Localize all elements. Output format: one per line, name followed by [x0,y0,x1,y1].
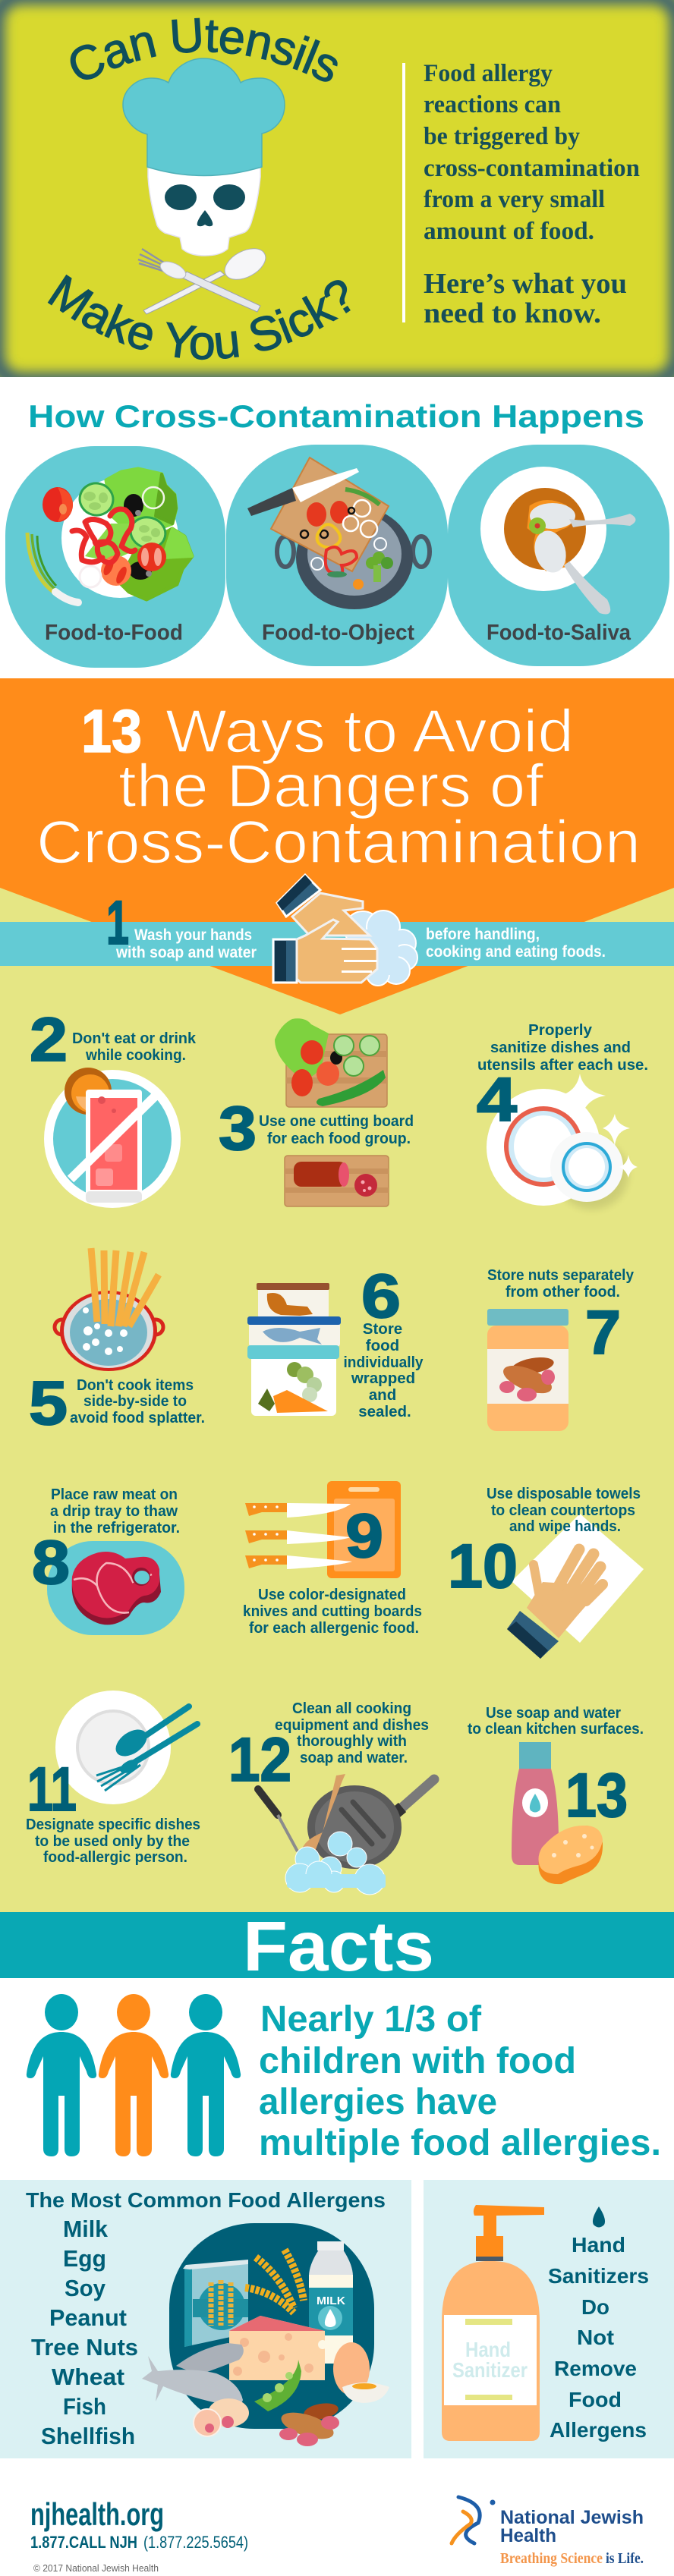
text: Place raw meat on [51,1486,178,1503]
text: and [369,1386,396,1404]
text: Use one cutting board [259,1112,414,1130]
text: soap and water. [300,1749,408,1766]
number: 3 [219,1094,257,1163]
fact text: allergies have [259,2082,497,2122]
icon: three people [27,1994,241,2156]
text [50,1486,180,1536]
number: 4 [477,1065,517,1134]
step 13: soap and water [468,1704,644,1884]
card: food-to-object [226,445,448,666]
icon: drop [593,2206,605,2228]
step 4: sanitize dishes [477,1021,648,1209]
text: for each food group. [267,1130,411,1147]
text: Store nuts separately [487,1266,635,1284]
step 1: wash hands [0,875,674,986]
icon: chef skull [123,58,285,256]
sanitizer text [548,2233,649,2442]
intro text: from a very small [424,186,605,213]
text: utensils after each use. [477,1056,648,1074]
peas [254,2360,301,2411]
icon: sanitizer bottle: Hand [465,2338,511,2361]
footer: logo [452,2497,644,2567]
peanuts [303,2401,339,2422]
icon: sponge [539,1826,603,1884]
number: 11 [27,1755,77,1824]
allergen list: Milk [63,2216,109,2242]
text [477,1021,648,1074]
step 9: color-designated knives [243,1481,422,1637]
text: individually [343,1354,424,1371]
number: 9 [345,1502,383,1571]
text [26,1816,200,1866]
text: Use disposable towels [487,1485,641,1502]
step 7: store nuts [487,1266,635,1431]
title top arc: Can Utensils [70,18,338,82]
step 3: one cutting board [219,1018,414,1206]
text: a drip tray to thaw [50,1502,178,1520]
step 2: don't eat or drink [30,1005,197,1208]
intro text: amount of food. [424,218,594,245]
intro text: need to know. [424,297,601,329]
banner: 13 ways orange arrow [0,678,674,1014]
heading: The Most Common Food Allergens [26,2188,386,2212]
icon: soap bottle [512,1742,559,1865]
fact text [259,1999,661,2163]
label: Food-to-Food [45,621,183,645]
step 5: no side by side [29,1248,205,1438]
text [487,1266,635,1301]
footer: logo: is Life. [606,2550,644,2567]
icon: pot with pasta [55,1248,163,1371]
text [259,1112,414,1147]
sanitizer text: Remove [554,2357,637,2380]
icon: hand on towel [507,1514,644,1659]
sanitizer text: Hand [572,2233,625,2257]
panel: 13 ways yellow background [0,678,674,1912]
footer: contact: 1.877.CALL NJH [30,2533,137,2552]
egg [333,2342,370,2395]
icon: sausage board [285,1156,389,1206]
step 10: disposable towels [448,1485,644,1659]
text: knives and cutting boards [243,1603,422,1620]
wheat [245,2250,304,2313]
text: to be used only by the [35,1832,190,1850]
text: food-allergic person. [43,1848,187,1866]
title bottom arc: Make You Sick? [47,275,351,360]
step 6: store individually [247,1262,424,1420]
heading: Cross-Contamination [36,808,641,876]
text right: cooking and eating foods. [426,943,606,961]
icon: sanitizer bottle [442,2205,544,2441]
footer: contact: (1.877.225.5654) [143,2533,248,2552]
allergen list: Soy [65,2275,106,2301]
text: equipment and dishes [275,1716,429,1734]
footer: contact: njhealth.org [30,2496,164,2532]
card: food-to-saliva [448,445,669,666]
text: sealed. [358,1403,411,1420]
heading: How Cross-Contamination Happens [28,398,644,434]
icon: board and knives [245,1481,401,1578]
icon: dna helix [452,2497,495,2543]
fact text: children with food [259,2041,576,2081]
number: 6 [361,1262,401,1331]
sanitizer text: Allergens [550,2418,647,2442]
text right: before handling, [426,926,540,943]
text [243,1586,422,1637]
step 11: specific dishes [26,1691,200,1866]
text [487,1485,641,1535]
allergen list [31,2216,138,2449]
text: to clean kitchen surfaces. [468,1720,644,1738]
card: food-to-food [5,446,225,668]
milk bottle: MILK [317,2294,345,2307]
intro text [424,60,640,329]
shells [208,2398,249,2427]
sanitizer text: Do [581,2295,609,2319]
text: wrapped [351,1370,415,1387]
text: Don't cook items [77,1376,194,1394]
text: while cooking. [85,1046,186,1064]
step 8: raw meat [32,1486,184,1635]
icon: plate with fork and spoon [55,1691,197,1804]
divider [402,63,405,322]
panel: how cross-contamination happens [5,398,669,668]
number: 10 [448,1532,518,1601]
number: 7 [585,1298,621,1367]
text: Use soap and water [486,1704,621,1722]
number: 8 [32,1528,70,1597]
intro text: cross-contamination [424,155,640,182]
allergen list: Wheat [52,2364,124,2390]
step 12: clean equipment [228,1700,434,1895]
fact text: Nearly 1/3 of [260,1999,482,2040]
label: Food-to-Object [262,621,414,645]
text left: Wash your hands [134,926,252,944]
text: avoid food splatter. [70,1409,205,1426]
icon: pan, utensils and bubbles [258,1774,434,1895]
text: Store [363,1320,402,1338]
text: sanitize dishes and [490,1039,631,1056]
panel: hand sanitizers [424,2180,674,2458]
banner: facts: Facts [243,1907,434,1986]
intro text: reactions can [424,91,561,118]
heading: Ways to Avoid [165,697,574,765]
footer: logo: Health [500,2525,556,2546]
text [275,1700,429,1766]
panel: intro header [0,0,674,377]
text: side-by-side to [83,1392,187,1410]
icon: soap foam [345,911,417,986]
allergen list: Tree Nuts [31,2334,138,2361]
number: 13 [565,1761,628,1830]
text: thoroughly with [297,1732,407,1750]
icon: clean plates [487,1074,638,1209]
text: Designate specific dishes [26,1816,200,1833]
banner: facts [0,1907,674,1986]
text: to clean countertops [491,1502,635,1519]
icon: crossed fork and spoon [138,242,271,314]
text left: with soap and water [115,944,257,961]
footer: contact [30,2496,248,2574]
sanitizer text: Food [568,2388,622,2411]
icon: no drink [44,1068,181,1208]
cheese [229,2316,327,2380]
number: 12 [228,1725,291,1794]
allergen list: Peanut [49,2304,127,2331]
text: in the refrigerator. [53,1519,180,1536]
text left [115,926,257,961]
sanitizer text: Not [577,2326,614,2349]
footer: contact: © 2017 National Jewish Health [33,2562,159,2574]
panel: common food allergens [0,2180,411,2458]
sanitizer text: Sanitizers [548,2264,649,2288]
heading [36,697,641,876]
icon: washing hands [273,875,377,983]
text [468,1704,644,1738]
number: 5 [29,1369,68,1438]
panel: children fact [27,1994,661,2163]
fish [142,2343,244,2405]
icon: vegetable board [275,1018,387,1107]
milk bottle [309,2241,353,2364]
heading: 13 [81,697,142,765]
text: Use color-designated [258,1586,406,1603]
text: from other food. [506,1283,620,1301]
text: Clean all cooking [292,1700,411,1717]
text [72,1030,197,1064]
text: for each allergenic food. [249,1619,419,1637]
allergen list: Egg [63,2245,106,2272]
number 1: 1 [106,889,129,958]
icon: sanitizer bottle: Sanitizer [452,2358,528,2382]
icon: stacked containers [247,1283,341,1416]
allergen list: Shellfish [41,2423,135,2449]
text: Don't eat or drink [72,1030,197,1047]
text: and wipe hands. [509,1518,621,1535]
intro text: Here’s what you [424,268,627,300]
text: Properly [528,1021,593,1039]
allergen list: Fish [63,2393,106,2420]
text: food [366,1337,399,1354]
icon: meat on tray [47,1541,184,1635]
text [343,1320,424,1420]
icon: peanut jar [487,1309,568,1431]
text [70,1376,205,1426]
flour box [183,2260,248,2347]
fact text: multiple food allergies. [259,2123,661,2163]
heading: the Dangers of [118,752,544,819]
label: Food-to-Saliva [487,621,631,645]
intro text: Food allergy [424,60,553,87]
number: 2 [30,1005,68,1074]
icon: allergen foods [142,2223,389,2446]
footer: logo: Breathing Science [500,2550,603,2567]
text right [426,926,606,961]
footer: logo: National Jewish [500,2507,644,2528]
intro text: be triggered by [424,123,580,150]
